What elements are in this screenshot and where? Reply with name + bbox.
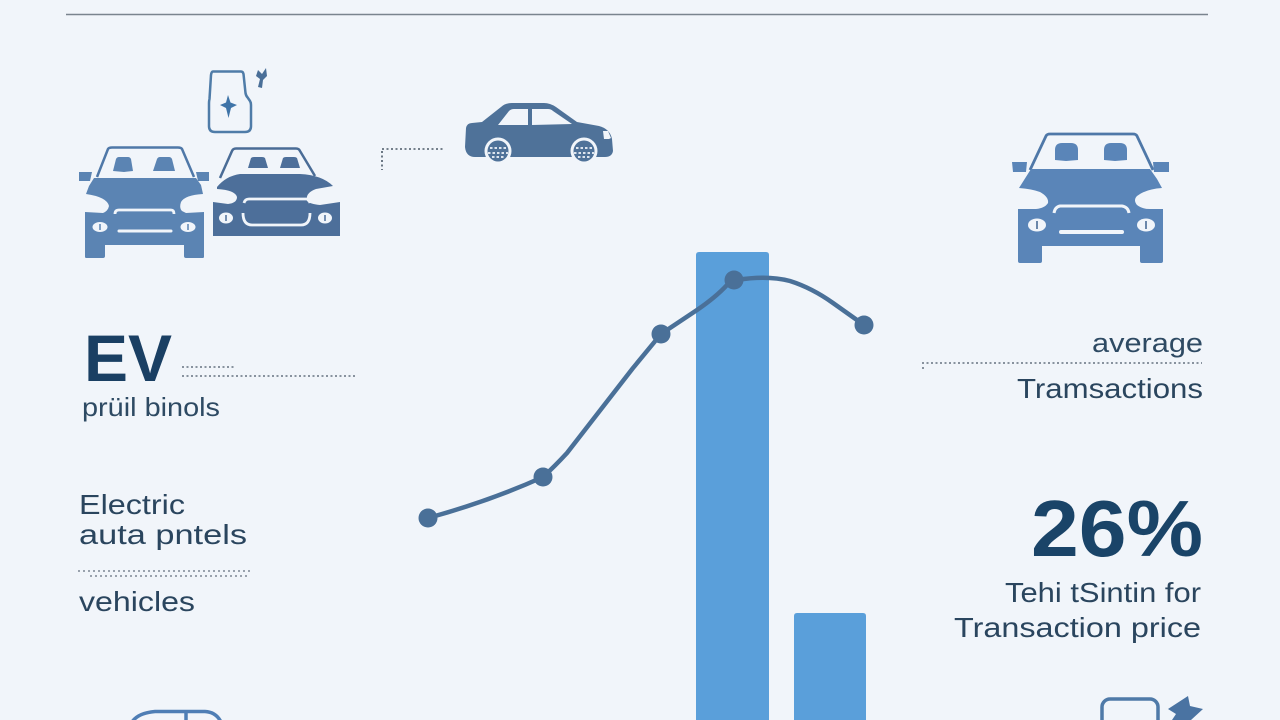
icon: charging battery xyxy=(209,68,267,132)
text: transactions: Tramsactions xyxy=(1017,373,1203,404)
icon: side view car xyxy=(465,103,613,164)
dotted rule: electric xyxy=(78,571,250,576)
text: EV caption: prüil binols xyxy=(82,392,220,422)
dotted rule: average xyxy=(922,363,1202,368)
text block: electric: auta pntels xyxy=(79,519,247,550)
text block: electric: Electric xyxy=(79,489,185,520)
heading: EV: EV xyxy=(84,321,172,395)
text: vehicles: vehicles xyxy=(79,586,195,617)
icon: front car right xyxy=(1012,134,1169,263)
text block: stat caption: Transaction price xyxy=(954,612,1201,643)
dotted rule: EV xyxy=(182,367,356,376)
dotted connector xyxy=(382,149,443,170)
text block: stat caption xyxy=(954,577,1201,643)
icon: front car dark xyxy=(213,148,340,236)
bar: short xyxy=(794,613,866,720)
trend line xyxy=(418,270,874,528)
text block: electric xyxy=(79,489,247,550)
stat: 26%: 26% xyxy=(1031,484,1203,573)
icon: bottom right charger xyxy=(1102,696,1203,720)
text: average: average xyxy=(1092,328,1203,358)
bar: tall xyxy=(696,252,769,720)
icon: front car light xyxy=(79,148,209,258)
text block: stat caption: Tehi tSintin for xyxy=(1005,577,1201,608)
chart: bars and line xyxy=(418,252,874,720)
icon: bottom left car xyxy=(132,712,221,720)
